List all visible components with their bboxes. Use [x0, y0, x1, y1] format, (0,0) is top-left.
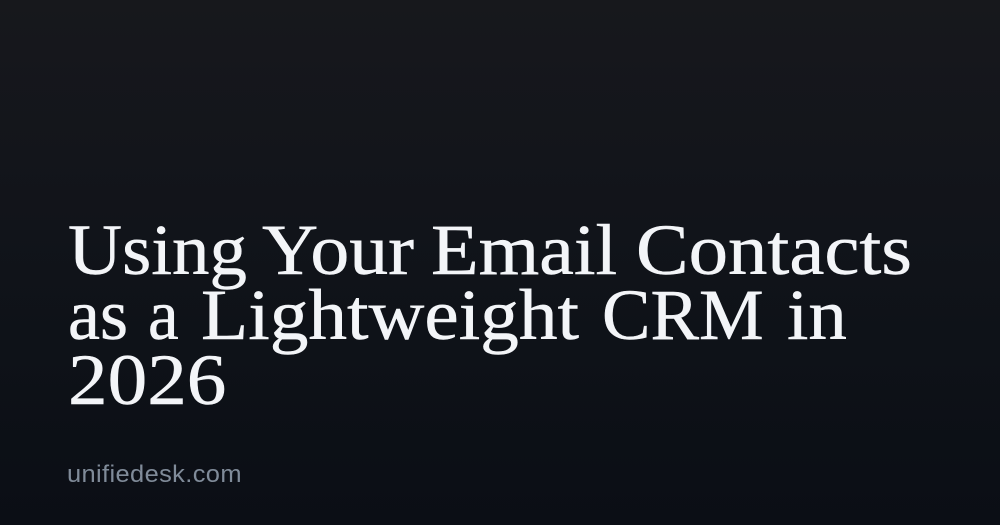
title: as — [68, 275, 128, 355]
title: 2026 — [68, 340, 226, 420]
title: CRM — [602, 275, 764, 355]
title: Using — [68, 210, 247, 290]
title — [68, 210, 912, 420]
title: a — [148, 275, 179, 355]
title: Contacts — [636, 210, 912, 290]
title: Email — [431, 210, 617, 290]
title: Lightweight — [201, 275, 579, 355]
title: in — [787, 275, 847, 355]
site name: unifiedesk.com — [67, 461, 242, 488]
title: Your — [262, 210, 414, 290]
